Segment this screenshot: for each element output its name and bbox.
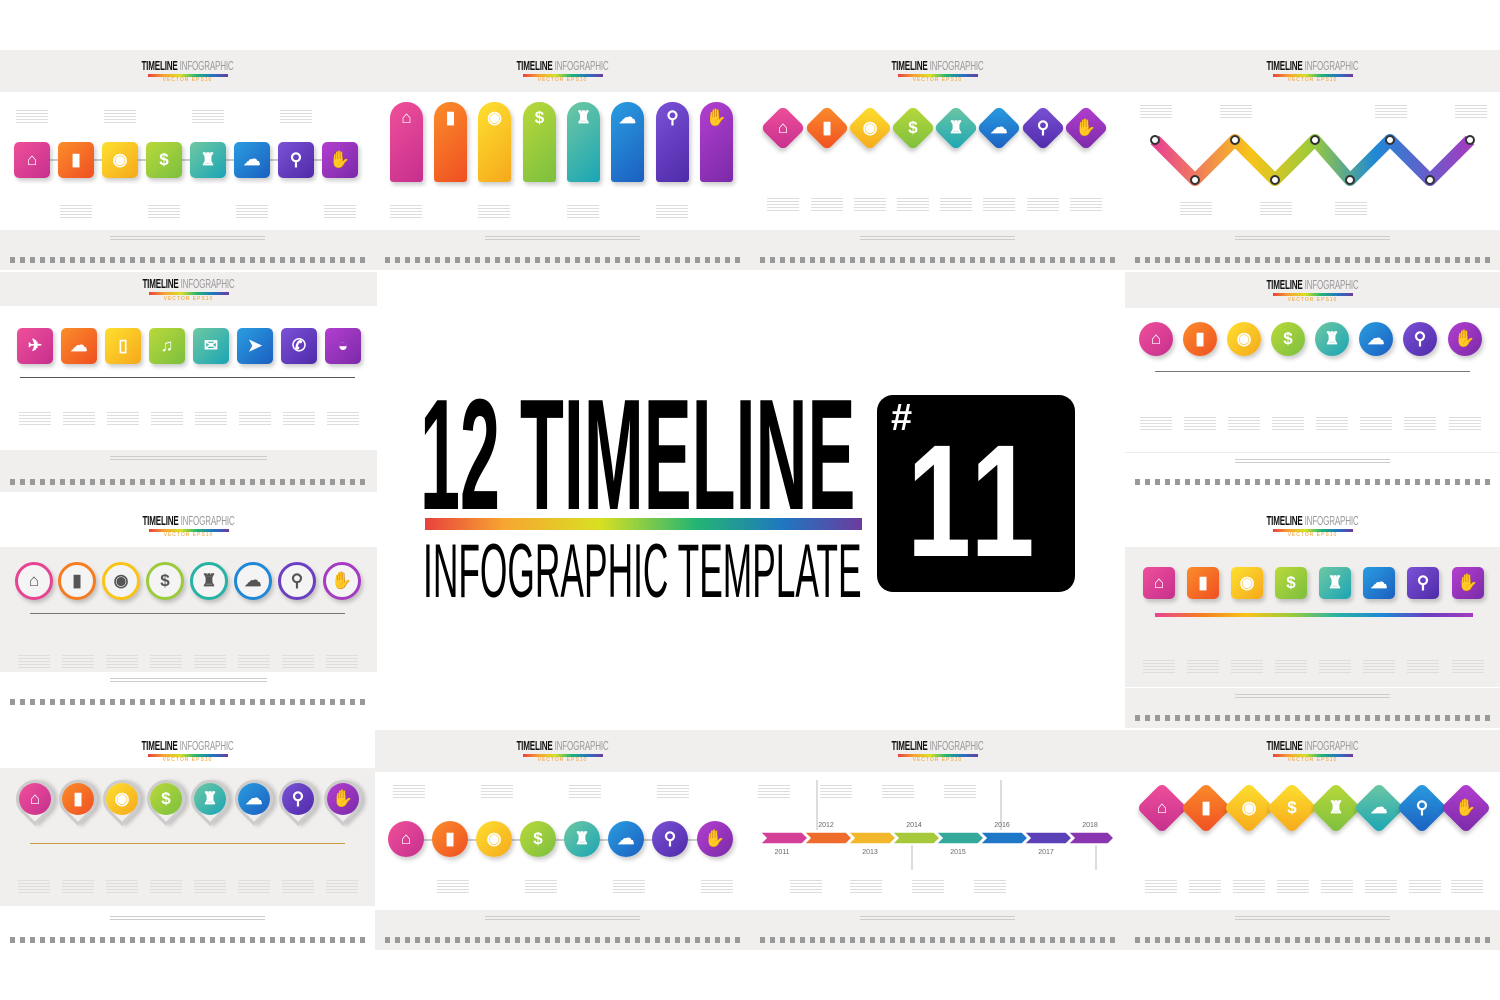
step tabs: ☁ xyxy=(619,108,636,127)
step boxes: ◒ xyxy=(338,336,348,355)
step rings: ⌂ xyxy=(29,571,39,590)
step tabs: ⚲ xyxy=(666,108,679,127)
panel title: TIMELINE INFOGRAPHIC xyxy=(1266,513,1359,528)
panel title: TIMELINE INFOGRAPHIC xyxy=(142,513,235,528)
arrow strip: 2015 xyxy=(950,849,966,856)
step boxes: ✆ xyxy=(292,336,306,355)
panel title: TIMELINE INFOGRAPHIC xyxy=(142,276,235,291)
step circles: ☁ xyxy=(618,829,634,848)
step pins: ✋ xyxy=(332,789,354,808)
step rings: $ xyxy=(160,571,170,590)
rainbow bar xyxy=(425,518,862,530)
panel: timeline squares xyxy=(0,50,375,270)
step squares xyxy=(1143,567,1488,604)
step diamonds xyxy=(1136,785,1490,836)
step boxes: ▯ xyxy=(118,336,128,355)
step circles: ✋ xyxy=(1454,329,1476,348)
step circles: ♜ xyxy=(574,829,590,848)
step squares: ⌂ xyxy=(27,150,37,169)
panel title: TIMELINE INFOGRAPHIC xyxy=(516,58,609,73)
step pins xyxy=(16,779,368,827)
panel: arrow years timeline: VECTOR EPS10 xyxy=(913,757,962,763)
panel: timeline tabs xyxy=(375,50,750,270)
panel: pin markers left: VECTOR EPS10 xyxy=(163,757,212,763)
heading line 2: INFOGRAPHIC TEMPLATE xyxy=(423,529,862,614)
step diamonds: ☁ xyxy=(1370,798,1388,817)
arrow strip: 2013 xyxy=(862,849,878,856)
arrow strip xyxy=(762,780,1113,870)
step diamonds: ⚲ xyxy=(1416,798,1428,817)
panel: arrow years timeline xyxy=(750,730,1125,950)
panel title: TIMELINE INFOGRAPHIC xyxy=(516,738,609,753)
step squares: ✋ xyxy=(1457,573,1479,592)
step circles: ▮ xyxy=(445,829,455,848)
arrow strip: 2014 xyxy=(906,822,922,829)
step squares: ☁ xyxy=(1370,573,1388,592)
step diamonds: $ xyxy=(1287,798,1297,817)
step diamonds: ♜ xyxy=(948,118,964,137)
panel: circles bottom middle xyxy=(375,730,750,950)
step circles: ⌂ xyxy=(401,829,411,848)
step rings: ⚲ xyxy=(291,571,303,590)
step squares: ⚲ xyxy=(1417,573,1429,592)
step rings: ◉ xyxy=(114,571,128,590)
step squares: ⌂ xyxy=(1154,573,1164,592)
panel: timeline tabs: VECTOR EPS10 xyxy=(538,77,587,83)
step rings: ☁ xyxy=(244,571,262,590)
panel: zigzag timeline xyxy=(1125,50,1500,270)
panel title: TIMELINE INFOGRAPHIC xyxy=(141,58,234,73)
panel: squares colored line right: VECTOR EPS10 xyxy=(1288,532,1337,538)
panel: zigzag timeline: VECTOR EPS10 xyxy=(1288,77,1337,83)
zigzag line xyxy=(1150,134,1475,186)
number: 11 xyxy=(907,411,1040,590)
step boxes: ☁ xyxy=(70,336,88,355)
step diamonds: ✋ xyxy=(1075,118,1097,137)
step boxes: ✉ xyxy=(204,336,218,355)
panel title: TIMELINE INFOGRAPHIC xyxy=(891,738,984,753)
step squares: ▮ xyxy=(71,150,81,169)
step squares: ♜ xyxy=(200,150,216,169)
badge #11 xyxy=(877,395,1075,592)
arrow strip: 2011 xyxy=(774,849,790,856)
step boxes: ♫ xyxy=(161,336,173,355)
panel: ring circles left: VECTOR EPS10 xyxy=(164,532,213,538)
panel: speech boxes timeline xyxy=(0,272,377,492)
panel title: TIMELINE INFOGRAPHIC xyxy=(1266,277,1359,292)
step tabs: ⌂ xyxy=(401,108,412,127)
panel: timeline diamonds xyxy=(750,50,1125,270)
step circles: $ xyxy=(1283,329,1293,348)
step circles: ✋ xyxy=(704,829,726,848)
step squares: ▮ xyxy=(1198,573,1208,592)
step tabs xyxy=(390,102,737,187)
main title xyxy=(420,367,862,614)
step boxes: ✈ xyxy=(28,336,42,355)
panel: large diamonds right: VECTOR EPS10 xyxy=(1288,757,1337,763)
step pins: ☁ xyxy=(246,789,262,808)
step tabs: ✋ xyxy=(706,108,727,127)
panel: speech boxes timeline: VECTOR EPS10 xyxy=(164,296,213,302)
arrow strip: 2012 xyxy=(818,822,834,829)
step tabs: $ xyxy=(535,108,544,127)
step circles: ◉ xyxy=(487,829,501,848)
step diamonds: ⚲ xyxy=(1037,118,1049,137)
step squares: ☁ xyxy=(244,150,260,169)
step pins: ⌂ xyxy=(30,789,40,808)
step diamonds: ⌂ xyxy=(1157,798,1167,817)
step diamonds: ▮ xyxy=(822,118,832,137)
step circles xyxy=(388,821,737,862)
step diamonds: $ xyxy=(908,118,918,137)
step diamonds: ◉ xyxy=(1242,798,1256,817)
step rings: ✋ xyxy=(331,571,353,590)
step rings: ▮ xyxy=(72,571,82,590)
panel: timeline diamonds: VECTOR EPS10 xyxy=(913,77,962,83)
step circles: ⌂ xyxy=(1151,329,1161,348)
step diamonds: ♜ xyxy=(1328,798,1344,817)
step circles: ⚲ xyxy=(1414,329,1426,348)
step diamonds: ⌂ xyxy=(778,118,788,137)
step diamonds: ✋ xyxy=(1455,798,1477,817)
step squares: $ xyxy=(159,150,169,169)
step circles xyxy=(1139,322,1486,361)
panel: timeline squares: VECTOR EPS10 xyxy=(163,77,212,83)
step tabs: ◉ xyxy=(487,108,502,127)
step circles: ▮ xyxy=(1195,329,1205,348)
step pins: ⚲ xyxy=(292,789,304,808)
step pins: ▮ xyxy=(73,789,83,808)
arrow strip: 2017 xyxy=(1038,849,1054,856)
step tabs: ♜ xyxy=(576,108,591,127)
heading line 1: 12 TIMELINE xyxy=(420,367,855,543)
step diamonds: ◉ xyxy=(863,118,877,137)
step tabs: ▮ xyxy=(446,108,455,127)
step squares: $ xyxy=(1286,573,1296,592)
panel: ring circles left xyxy=(0,505,377,712)
hash: # xyxy=(891,397,912,439)
step squares: ◉ xyxy=(1240,573,1254,592)
panel: circle pins right xyxy=(1125,272,1500,492)
panel title: TIMELINE INFOGRAPHIC xyxy=(141,738,234,753)
step squares xyxy=(14,142,362,183)
panel: circles bottom middle: VECTOR EPS10 xyxy=(538,757,587,763)
step squares: ⚲ xyxy=(290,150,302,169)
step diamonds: ▮ xyxy=(1201,798,1211,817)
panel title: TIMELINE INFOGRAPHIC xyxy=(891,58,984,73)
step circles: ◉ xyxy=(1237,329,1251,348)
panel title: TIMELINE INFOGRAPHIC xyxy=(1266,58,1359,73)
step boxes: ➤ xyxy=(248,336,262,355)
step squares: ♜ xyxy=(1327,573,1343,592)
step squares: ◉ xyxy=(113,150,127,169)
step circles: ⚲ xyxy=(664,829,676,848)
panel: squares colored line right xyxy=(1125,505,1500,728)
step diamonds xyxy=(760,108,1107,154)
step diamonds: ☁ xyxy=(990,118,1008,137)
step pins: $ xyxy=(161,789,171,808)
panel: pin markers left xyxy=(0,730,375,950)
panel: circle pins right: VECTOR EPS10 xyxy=(1288,297,1337,303)
step circles: $ xyxy=(533,829,543,848)
arrow strip: 2018 xyxy=(1082,822,1098,829)
arrow strip: 2016 xyxy=(994,822,1010,829)
step circles: ☁ xyxy=(1368,329,1384,348)
step pins: ◉ xyxy=(115,789,129,808)
panel: large diamonds right xyxy=(1125,730,1500,950)
step squares: ✋ xyxy=(329,150,351,169)
step circles: ♜ xyxy=(1324,329,1340,348)
step boxes xyxy=(17,328,365,369)
step pins: ♜ xyxy=(202,789,218,808)
step rings xyxy=(15,562,365,605)
step rings: ♜ xyxy=(201,571,217,590)
panel title: TIMELINE INFOGRAPHIC xyxy=(1266,738,1359,753)
